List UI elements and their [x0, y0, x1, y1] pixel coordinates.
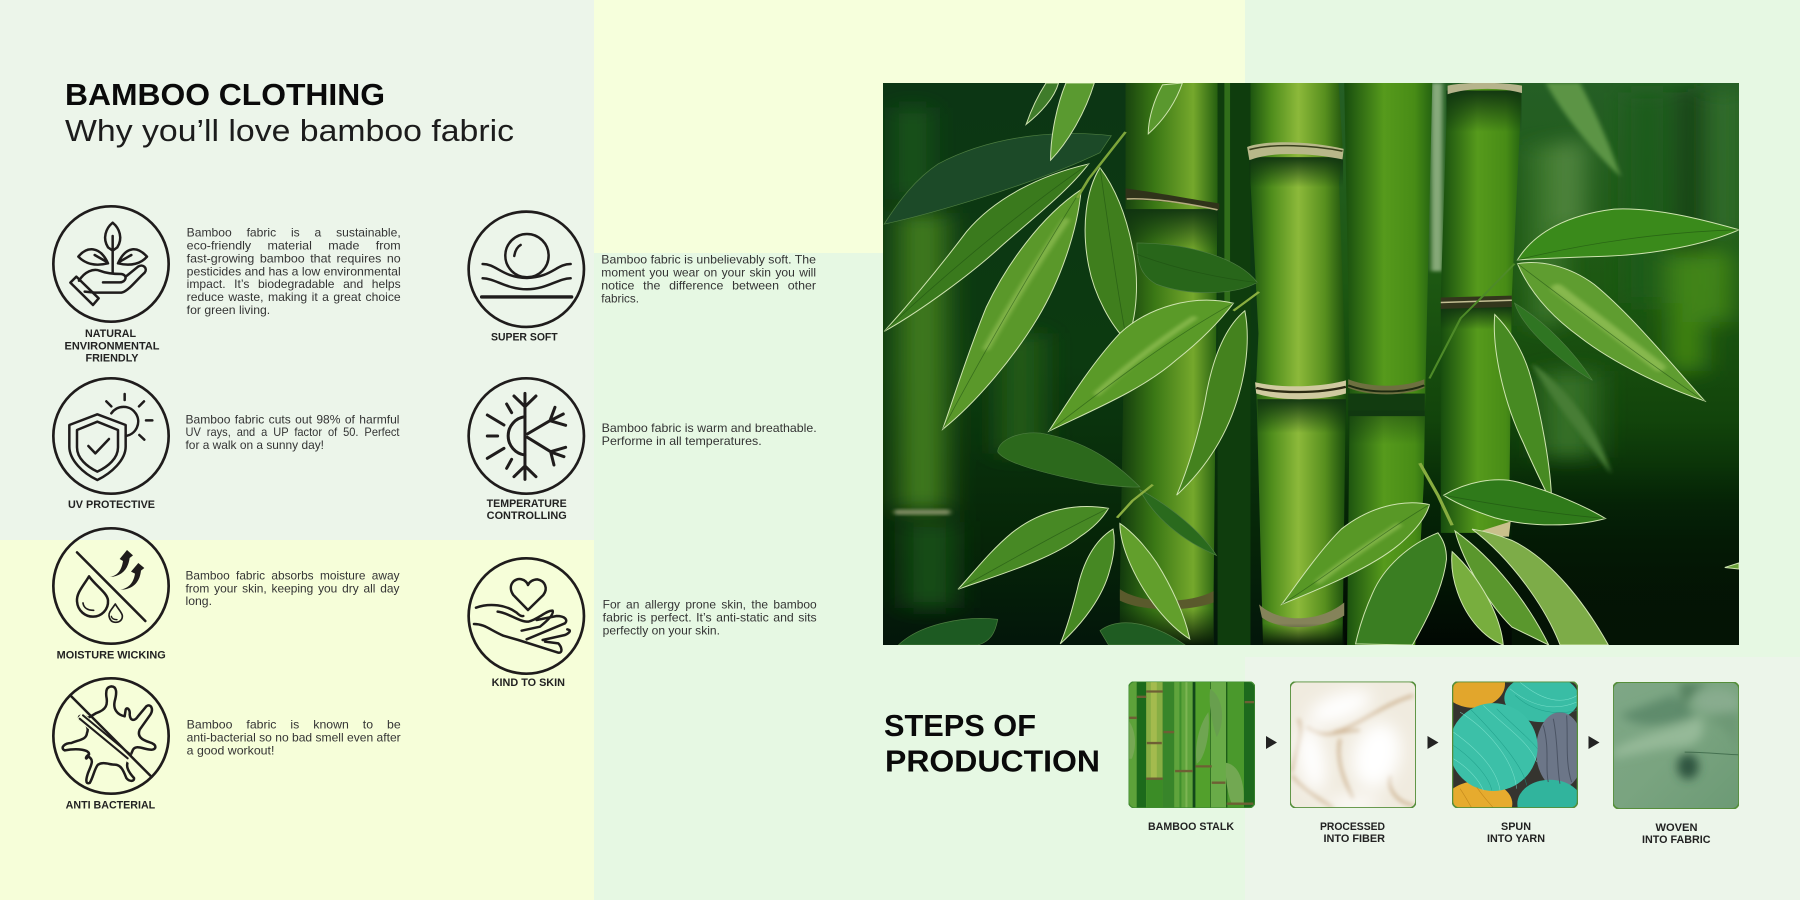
stalk D [1441, 85, 1522, 533]
image: bamboo stalks [1128, 682, 1255, 808]
description: fabrics. [601, 292, 639, 305]
feature: kind to skin [469, 558, 817, 689]
description: Bamboo fabric absorbs moisture away [186, 569, 400, 582]
caption [1642, 822, 1711, 846]
caption: BAMBOO STALK [1148, 821, 1234, 833]
description: UV rays, and a UP factor of 50. Perfect [186, 426, 400, 439]
label: NATURAL [85, 328, 137, 340]
leaves bottom cluster [1444, 480, 1606, 525]
caption: INTO FABRIC [1642, 834, 1711, 846]
feature: temperature controlling [469, 378, 817, 522]
description [186, 569, 400, 608]
description: reduce waste, making it a great choice [187, 291, 401, 304]
image: green fabric [1613, 682, 1739, 809]
step 2: processed into fiber [1290, 682, 1416, 845]
caption: SPUN [1501, 821, 1531, 833]
step 4: woven into fabric [1613, 682, 1739, 846]
description: eco-friendly material made from [187, 239, 401, 252]
label: CONTROLLING [487, 510, 567, 522]
caption [1487, 821, 1545, 845]
description: pesticides and has a low environmental [187, 265, 401, 278]
image: fiber [1290, 682, 1416, 808]
description [187, 226, 401, 317]
label: TEMPERATURE [487, 498, 567, 510]
description: Bamboo fabric is warm and breathable. [602, 422, 817, 435]
feature: anti bacterial [53, 678, 401, 811]
caption: INTO FIBER [1324, 833, 1385, 845]
right background fade [1512, 628, 1739, 645]
description: long. [186, 595, 212, 608]
label: UV PROTECTIVE [68, 499, 155, 511]
leaves right [1517, 209, 1739, 260]
description: Performe in all temperatures. [602, 435, 762, 448]
stalk B [1251, 83, 1346, 645]
heading: steps of production: PRODUCTION [885, 745, 1100, 779]
image: yarn balls [1452, 682, 1578, 808]
description: for a walk on a sunny day! [186, 439, 324, 452]
step 3: spun into yarn [1452, 682, 1578, 842]
description [602, 422, 817, 448]
heading: bamboo clothing: BAMBOO CLOTHING [65, 77, 385, 112]
description: anti-bacterial so no bad smell even after [187, 732, 401, 745]
icon: shield and sun [53, 378, 169, 494]
stalk C [1344, 83, 1432, 645]
icon: heart over hand [469, 558, 584, 674]
arrow [1428, 736, 1438, 749]
description [601, 253, 816, 305]
arrow [1266, 736, 1277, 749]
label [487, 498, 567, 522]
label: FRIENDLY [86, 352, 138, 364]
description: Bamboo fabric is a sustainable, [187, 226, 401, 239]
icon: ball on soft layers [469, 212, 584, 327]
label: KIND TO SKIN [492, 677, 565, 689]
description: For an allergy prone skin, the bamboo [603, 598, 817, 611]
description: Bamboo fabric is known to be [187, 719, 401, 732]
heading: steps of production: STEPS OF [884, 709, 1036, 743]
leaves lower left [998, 433, 1140, 487]
label: MOISTURE WICKING [57, 649, 166, 661]
caption: INTO YARN [1487, 833, 1545, 845]
title block [65, 77, 514, 148]
description: Bamboo fabric is unbelievably soft. The [601, 253, 816, 266]
caption: PROCESSED [1320, 821, 1385, 833]
label [64, 328, 160, 364]
stalk A [1120, 83, 1218, 645]
description: moment you wear on your skin you will [601, 266, 816, 279]
description: impact. It’s biodegradable and helps [187, 278, 401, 291]
arrow [1588, 736, 1600, 749]
description: notice the difference between other [601, 279, 816, 292]
label: ANTI BACTERIAL [66, 799, 156, 811]
label: ENVIRONMENTAL [64, 340, 160, 352]
icon: drops and arrows [53, 528, 169, 644]
hero illustration: bamboo stalks and leaves [883, 83, 1739, 645]
heading: steps of production [884, 709, 1100, 779]
leaves middle [1137, 243, 1257, 293]
feature: super soft [469, 212, 816, 343]
description [187, 719, 401, 757]
caption: WOVEN [1656, 822, 1698, 834]
icon: plant in hand [53, 206, 169, 322]
description: for green living. [187, 304, 270, 317]
feature: uv protective [53, 378, 400, 511]
icon: crossed splat [53, 678, 169, 794]
feature: natural environmental friendly [53, 206, 401, 364]
description: Bamboo fabric cuts out 98% of harmful [186, 413, 400, 426]
description: perfectly on your skin. [603, 624, 720, 637]
description [186, 413, 400, 452]
subheading: Why you’ll love bamboo fabric [65, 113, 514, 148]
description: from your skin, keeping you dry all day [186, 582, 400, 595]
step 1: bamboo stalk [1128, 682, 1255, 833]
description [603, 598, 817, 637]
label: SUPER SOFT [491, 331, 558, 343]
caption [1320, 821, 1385, 845]
description: a good workout! [187, 744, 274, 757]
description: fabric is perfect. It’s anti-static and sits [603, 611, 817, 624]
icon: half sun half snowflake [469, 378, 584, 494]
description: fast-growing bamboo that requires no [187, 252, 401, 265]
feature: moisture wicking [53, 528, 400, 661]
leaves upper left [884, 133, 1111, 224]
